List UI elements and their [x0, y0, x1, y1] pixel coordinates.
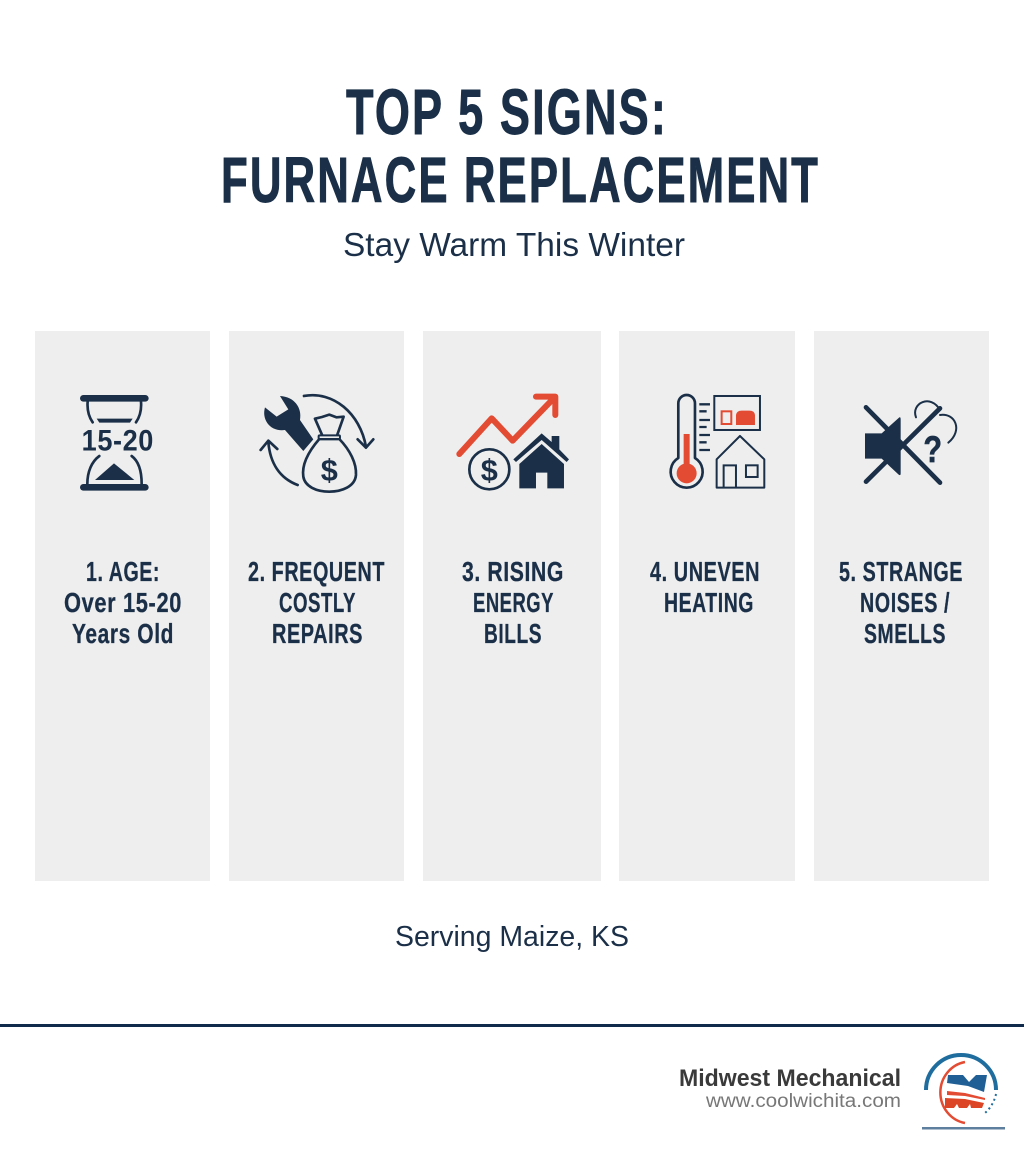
- label: uneven heating: 4. UNEVEN: [650, 556, 760, 587]
- logo: [922, 1055, 1005, 1130]
- label: uneven heating: HEATING: [664, 587, 754, 618]
- icon: hourglass: 15-20: [82, 425, 154, 458]
- icon: muted speaker with question mark: ?: [923, 428, 942, 470]
- label: noises and smells: NOISES /: [860, 587, 950, 618]
- label: noises and smells: SMELLS: [864, 618, 946, 649]
- label: energy bills: [462, 556, 564, 649]
- label: repairs: REPAIRS: [272, 618, 363, 649]
- title: TOP 5 SIGNS:: [346, 76, 668, 148]
- icon: thermometer, floor plan and house: [671, 395, 764, 488]
- footer divider: [0, 1024, 1024, 1027]
- label: energy bills: ENERGY: [473, 587, 554, 618]
- icon: wrench and money bag: [261, 395, 373, 492]
- icon: wrench and money bag: $: [321, 453, 338, 487]
- label: age: 1. AGE:: [86, 556, 160, 587]
- title: [221, 76, 820, 216]
- label: repairs: 2. FREQUENT: [248, 556, 385, 587]
- icon: rising arrow, dollar and house: [459, 397, 569, 489]
- icon: muted speaker with question mark: [865, 401, 956, 483]
- panel: sign 1 age: [35, 331, 210, 881]
- label: noises and smells: [839, 556, 963, 649]
- panel: sign 3 energy bills: [423, 331, 601, 881]
- label: age: Years Old: [72, 618, 174, 649]
- service area text: Serving Maize, KS: [395, 921, 629, 953]
- panel: sign 4 uneven heating: [619, 331, 795, 881]
- label: noises and smells: 5. STRANGE: [839, 556, 963, 587]
- company name: Midwest Mechanical: [679, 1065, 901, 1092]
- label: uneven heating: [650, 556, 760, 618]
- icon: rising arrow, dollar and house: $: [481, 453, 498, 487]
- website: www.coolwichita.com: [705, 1091, 901, 1112]
- panel: sign 2 repairs: [229, 331, 404, 881]
- label: repairs: [248, 556, 385, 649]
- label: energy bills: BILLS: [484, 618, 542, 649]
- label: age: [64, 556, 182, 649]
- icon: hourglass: [80, 395, 154, 491]
- panel: sign 5 noises and smells: [814, 331, 989, 881]
- subtitle: Stay Warm This Winter: [343, 226, 685, 263]
- label: age: Over 15-20: [64, 587, 182, 618]
- label: repairs: COSTLY: [279, 587, 356, 618]
- label: energy bills: 3. RISING: [462, 556, 564, 587]
